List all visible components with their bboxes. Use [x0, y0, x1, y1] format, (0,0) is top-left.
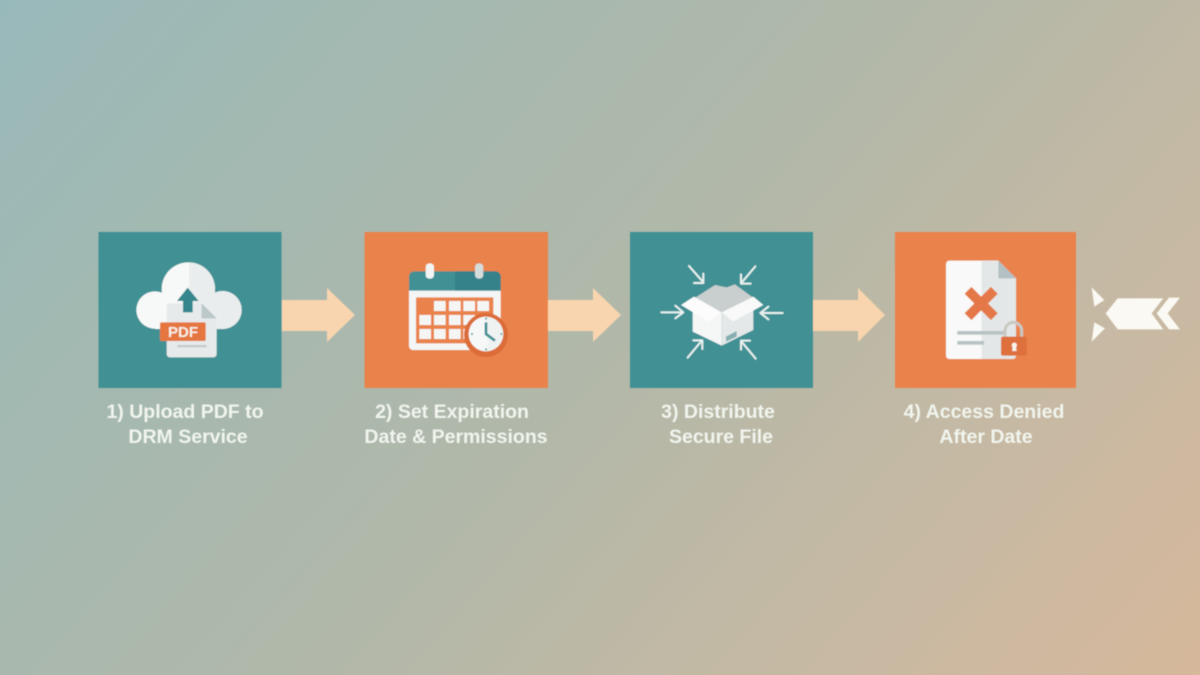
panel: step 4 access denied [895, 232, 1076, 388]
icon: open box with arrows [661, 266, 783, 359]
label: step 1: DRM Service [128, 426, 248, 448]
arrow: step 1 to 2 [282, 288, 355, 342]
icon: white chevron mark [1092, 287, 1180, 342]
arrow: step 3 to 4 [813, 288, 885, 342]
label: step 2: 2) Set Expiration [375, 401, 529, 423]
icon: cloud with PDF upload [136, 262, 242, 357]
label: step 1: 1) Upload PDF to [106, 401, 264, 423]
arrow: step 2 to 3 [548, 288, 621, 342]
icon: calendar with clock [409, 263, 508, 357]
panel: step 1 upload [98, 232, 282, 388]
panel: step 2 expiration [364, 232, 548, 388]
panel: step 3 distribute [630, 232, 813, 388]
icon: denied document with lock [946, 261, 1027, 359]
label: step 2: Date & Permissions [364, 426, 548, 448]
icon label: PDF: PDF [168, 324, 198, 341]
label: step 3: 3) Distribute [661, 401, 775, 423]
label: step 4: 4) Access Denied [904, 401, 1064, 423]
label: step 3: Secure File [669, 426, 773, 448]
label: step 4: After Date [939, 426, 1033, 448]
